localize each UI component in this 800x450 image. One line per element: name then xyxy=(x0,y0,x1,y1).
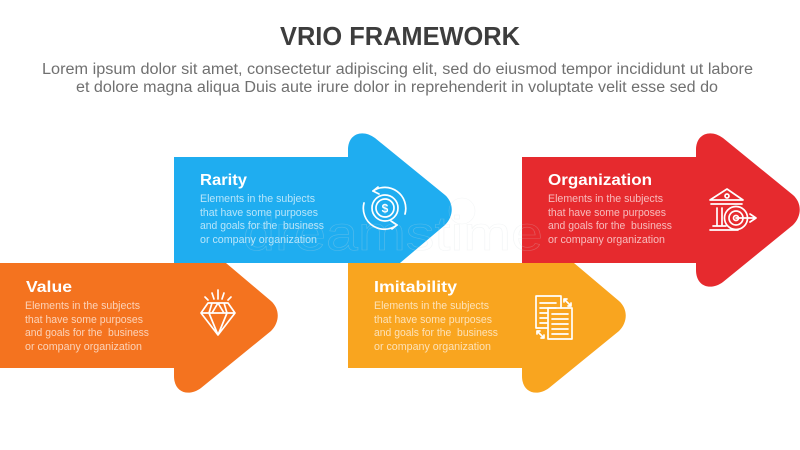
panel: value arrow: Elements in the subjects xyxy=(25,300,140,312)
panel: rarity arrow: or company organization xyxy=(200,234,317,246)
panel: value arrow: that have some purposes xyxy=(25,314,143,326)
panel: imitability arrow: Elements in the subjects xyxy=(374,300,489,312)
panel: value arrow: and goals for the business xyxy=(25,327,149,339)
subtitle text xyxy=(42,61,753,96)
panel: organization arrow: Organization xyxy=(548,172,652,189)
icon: documents xyxy=(536,296,572,339)
panel: rarity arrow: Rarity xyxy=(200,172,247,189)
panel: organization arrow: and goals for the business xyxy=(548,220,672,232)
panel: value arrow xyxy=(0,263,278,393)
panel: imitability arrow: and goals for the business xyxy=(374,327,498,339)
icon: dollar cycle xyxy=(363,187,406,229)
panel: imitability arrow: that have some purposes xyxy=(374,314,492,326)
panel: imitability arrow: Imitability xyxy=(374,279,457,296)
icon: bank and target xyxy=(710,189,756,230)
panel: rarity arrow: Elements in the subjects xyxy=(200,193,315,205)
title: VRIO FRAMEWORK xyxy=(280,21,520,51)
panel: value arrow: or company organization xyxy=(25,341,142,353)
panel: organization arrow: Elements in the subjects xyxy=(548,193,663,205)
panel: rarity arrow: that have some purposes xyxy=(200,207,318,219)
subtitle text: et dolore magna aliqua Duis aute irure dolor in reprehenderit in voluptate velit esse sed do xyxy=(76,79,718,96)
icon: diamond xyxy=(201,290,235,335)
watermark: dreamstime xyxy=(243,208,543,261)
panel: rarity arrow: and goals for the business xyxy=(200,220,324,232)
panel: imitability arrow xyxy=(348,263,626,393)
subtitle text: Lorem ipsum dolor sit amet, consectetur adipiscing elit, sed do eiusmod tempor incididunt ut labore xyxy=(42,61,753,78)
panel: rarity arrow xyxy=(174,133,452,263)
panel: imitability arrow: or company organization xyxy=(374,341,491,353)
icon: dollar cycle: $ xyxy=(382,202,389,216)
panel: value arrow: Value xyxy=(26,279,72,296)
panel: organization arrow: that have some purposes xyxy=(548,207,666,219)
panel: organization arrow xyxy=(522,133,800,287)
panel: organization arrow: or company organization xyxy=(548,234,665,246)
